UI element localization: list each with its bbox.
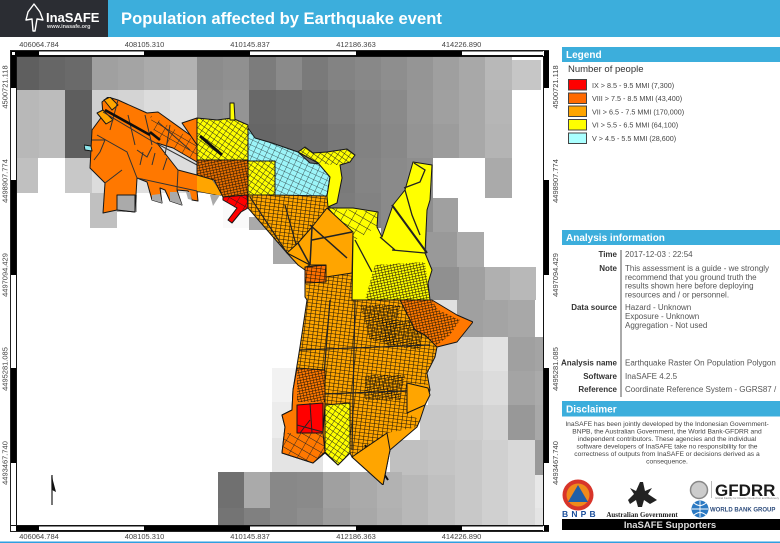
row: reference: Coordinate Reference System - GGRS87 / [625,385,777,394]
disclaimer text: correctness of outputs from InaSAFE or decisions derived as a [574,451,760,458]
logo: InaSAFE: www.inasafe.org [46,24,91,30]
polygon: south-west dark-orange district [282,368,325,463]
logo: Australian Government [606,482,678,519]
disclaimer heading: Disclaimer [566,404,617,416]
polygon: south yellow district [325,403,350,465]
polygon: red port, north (MMI IX) [223,195,248,223]
legend item: V [568,133,676,144]
polygon: north yellow district (MMI VI) [182,103,248,162]
polygon: main southern city (MMI VII) [248,195,437,485]
row: software [583,372,678,381]
row: note: Note [599,264,618,273]
logo: BNPB [562,480,599,519]
coordinate labels: top: 414226.890 [442,40,481,49]
coordinate labels: top: 408105.310 [125,40,164,49]
choropleth: affected population polygons [84,97,473,485]
raster: population exposure grey grid [17,57,543,525]
polygon: south-east orange lobes [352,383,430,485]
coordinate labels: bottom [19,532,481,541]
coordinate labels: bottom: 406064.784 [19,532,59,541]
coordinate labels: right: 4495281.085 [551,347,560,391]
panel: legend [562,47,780,144]
coordinate labels: right [551,65,560,485]
disclaimer text: consequence. [646,458,688,466]
logo: BNPB: BNPB [562,509,599,519]
coordinate labels: left: 4500721.118 [0,65,10,109]
row: note: This assessment is a guide - we strongly [625,264,769,273]
legend heading: Legend [566,50,602,61]
polygon: central orange lobes [287,208,353,277]
logo: Australian Government: Australian Government [606,511,678,519]
header band [0,0,780,37]
coordinate labels: bottom: 414226.890 [442,532,481,541]
logo: GFDRR [690,481,780,500]
row: reference: Reference [578,385,618,394]
coordinate labels: top: 412186.363 [336,40,376,49]
coordinate labels: left: 4493467.740 [0,441,10,485]
coordinate labels: top: 410145.837 [230,40,270,49]
row: note: results shown here before deploying [625,282,754,290]
row: note: resources and / or personnel. [625,290,729,300]
legend item: VI: VI > 5.5 - 6.5 MMI (64,100) [592,120,678,130]
analysis heading: Analysis information [566,233,665,244]
panel: disclaimer [562,401,780,466]
polygon: red district, south (MMI IX) [297,403,323,433]
coordinate labels: bottom: 412186.363 [336,532,376,541]
legend item: V: V > 4.5 - 5.5 MMI (28,600) [592,134,676,143]
coordinate labels: right: 4497094.429 [551,253,560,297]
legend subtitle: Number of people [568,64,644,75]
row: data source: Hazard - Unknown [625,303,691,312]
coordinate labels: bottom: 408105.310 [125,532,164,541]
polygon: north-west orange district (MMI VIII) [84,97,223,213]
coordinate labels: right: 4493467.740 [551,441,560,485]
polygon: cyan district (MMI V) [248,128,332,196]
bottom rule [0,542,780,543]
row: data source: Exposure - Unknown [625,312,699,321]
disclaimer text: InaSAFE has been jointly developed by the Indonesian Government- [565,421,769,428]
disclaimer heading [562,401,780,416]
row: data source [571,303,707,330]
logo: InaSAFE: InaSAFE [46,10,100,25]
polygon: north-central dark-orange block [305,265,326,283]
coordinate labels: left [0,65,10,485]
coordinate labels: left: 4497094.429 [0,253,10,297]
logo: World Bank Group: WORLD BANK GROUP [710,508,775,514]
logo: GFDRR: GFDRR [715,481,775,500]
polygon: eastern dark-orange spur [400,300,473,347]
legend item: VIII [568,93,682,104]
divider line [620,250,622,397]
coordinate labels: top: 406064.784 [19,40,59,49]
polygon: north-east yellow ear [298,147,355,207]
title: Population affected by Earthquake event [121,9,442,28]
disclaimer text [565,421,769,466]
legend item: VI [568,120,678,130]
polygon: central dark-orange block [197,160,248,197]
legend item: VII: VII > 6.5 - 7.5 MMI (170,000) [592,108,684,116]
row: data source: Data source [571,303,618,312]
coordinate labels: bottom: 410145.837 [230,532,270,541]
coordinate labels: right: 4498907.774 [551,159,560,203]
coordinate labels: left: 4495281.085 [0,347,10,391]
disclaimer text: software developers of InaSAFE take no responsibility for the [576,444,758,450]
row: data source: Aggregation - Not used [625,321,707,330]
legend item: VII [568,106,684,116]
legend item: IX: IX > 8.5 - 9.5 MMI (7,300) [592,81,674,90]
row: note: recommend that you ground truth the [625,273,757,282]
polygon: central yellow cell [248,161,275,195]
row: software: InaSAFE 4.2.5 [625,372,678,381]
map panel [0,40,560,541]
legend heading [562,47,780,62]
analysis heading [562,230,780,245]
row: note [599,264,769,300]
row: analysis name: Analysis name [561,358,618,368]
row: software: Software [583,372,618,381]
coordinate labels: top [19,40,481,49]
disclaimer text: BNPB, the Australian Government, the World Bank-GFDRR and [572,428,762,436]
logo: InaSAFE [0,0,108,37]
panel: supporters [562,480,780,531]
row: time: Time [598,250,618,259]
legend item: VIII: VIII > 7.5 - 8.5 MMI (43,400) [592,94,682,103]
map frame with coordinate scale bands [10,50,549,532]
logo: GFDRR: Global Facility for Disaster Reduction and Recovery [715,496,780,500]
row: time: 2017-12-03 : 22:54 [625,250,693,259]
row: analysis name: Earthquake Raster On Population Polygon [625,358,776,368]
panel: analysis information [561,230,780,397]
icon: north arrow [52,475,56,505]
coordinate labels: left: 4498907.774 [0,159,10,203]
polygon: eastern yellow district [328,162,432,300]
supporters caption bar [562,519,780,531]
coordinate labels: right: 4500721.118 [551,65,560,109]
supporters caption bar: InaSAFE Supporters [624,520,716,531]
legend item: IX [568,80,674,90]
logo: World Bank Group [692,500,775,518]
disclaimer text: independent contributors. These agencies and the individual [578,436,757,443]
